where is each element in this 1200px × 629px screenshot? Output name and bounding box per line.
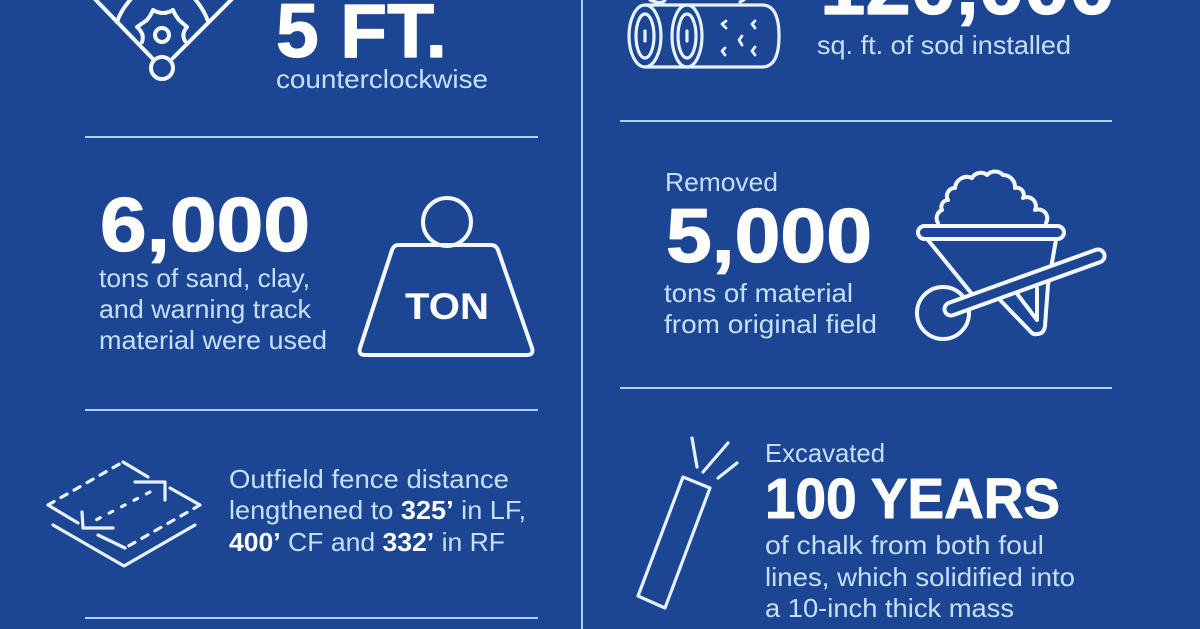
- stat: 120,000 sq ft of sod: [817, 0, 1115, 60]
- stat: removed 5,000 tons: tons of material: [664, 278, 853, 308]
- text: outfield fence distance: Outfield fence distance: [229, 464, 509, 494]
- stat: 6,000 tons: 6,000: [100, 183, 310, 268]
- text: outfield fence distance: 400’ CF and 332’ in RF: [229, 527, 505, 557]
- icon: stick of chalk: [638, 438, 737, 608]
- icon: rolls of sod: [629, 0, 779, 67]
- icon: baseball diamond: [93, 0, 234, 79]
- stat: removed 5,000 tons: [664, 167, 877, 339]
- icon: field dimensions arrows: [48, 462, 200, 566]
- text: outfield fence distance: [229, 464, 526, 557]
- stat: removed 5,000 tons: from original field: [664, 309, 877, 339]
- stat: excavated 100 years: 100 YEARS: [765, 467, 1060, 531]
- stat: excavated 100 years: [765, 438, 1075, 623]
- stat: 6,000 tons: [99, 183, 327, 355]
- stat: removed 5,000 tons: 5,000: [666, 194, 872, 279]
- icon: ton weight: TON: [405, 286, 489, 327]
- stat: 6,000 tons: tons of sand, clay,: [99, 263, 310, 293]
- stat: 5 ft counterclockwise: [276, 0, 488, 94]
- stat: 5 ft counterclockwise: counterclockwise: [276, 64, 488, 94]
- stat: excavated 100 years: Excavated: [765, 438, 885, 468]
- stat: excavated 100 years: of chalk from both foul: [765, 530, 1044, 560]
- stat: removed 5,000 tons: Removed: [665, 167, 778, 197]
- stat: excavated 100 years: lines, which solidified into: [765, 562, 1075, 592]
- stat: 120,000 sq ft of sod: sq. ft. of sod installed: [817, 30, 1071, 60]
- text: outfield fence distance: lengthened to 325’ in LF,: [229, 495, 526, 525]
- icon: wheelbarrow: [917, 172, 1098, 339]
- stat: 6,000 tons: and warning track: [99, 294, 312, 324]
- stat: 6,000 tons: material were used: [99, 325, 327, 355]
- stat: excavated 100 years: a 10-inch thick mass: [765, 593, 1014, 623]
- icon: ton weight: [360, 198, 532, 355]
